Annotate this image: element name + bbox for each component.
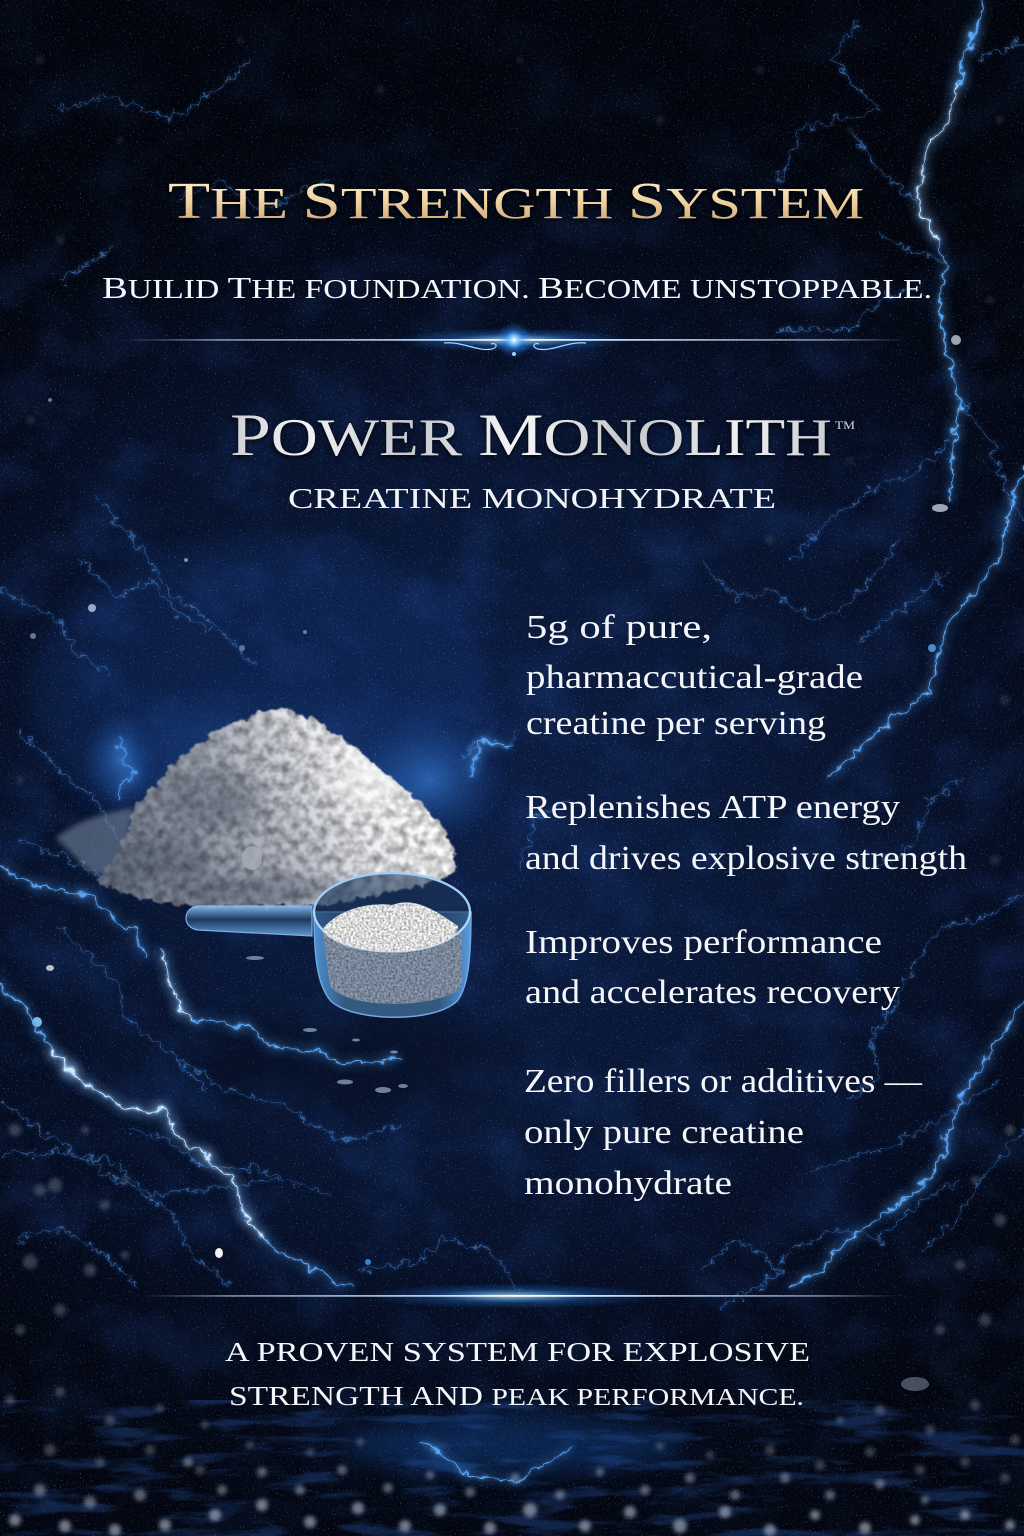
benefit 1: creatine per serving xyxy=(526,705,826,742)
benefit 1: 5g of pure, xyxy=(526,609,712,646)
top divider with ornament xyxy=(120,322,910,358)
scoop rim back xyxy=(314,873,470,951)
benefit 1: pharmaccutical-grade xyxy=(526,659,863,696)
closing statement: A PROVEN SYSTEM FOR EXPLOSIVE xyxy=(225,1337,810,1367)
benefit 4: Zero fillers or additives — xyxy=(524,1063,923,1100)
closing statement xyxy=(225,1337,810,1411)
benefit 4: monohydrate xyxy=(524,1165,732,1202)
floor row 3 bright xyxy=(9,1499,1015,1536)
benefit 3: Improves performance xyxy=(525,924,882,961)
benefit 2: and drives explosive strength xyxy=(525,840,967,877)
icon: powder pile xyxy=(56,707,455,908)
bright bolt cores xyxy=(50,85,957,1240)
scoop body xyxy=(314,912,471,1017)
side bokeh xyxy=(9,1124,1015,1335)
benefit 2: Replenishes ATP energy xyxy=(525,789,900,826)
bottom divider xyxy=(140,1283,900,1309)
scoop handle xyxy=(186,906,312,936)
scoop powder fill xyxy=(322,925,462,1004)
powder flecks on surface xyxy=(246,956,408,1093)
closing statement: STRENGTH AND PEAK PERFORMANCE. xyxy=(229,1381,804,1411)
rim front highlight xyxy=(314,912,470,952)
bokeh particles xyxy=(30,335,961,1391)
product subtitle: CREATINE MONOHYDRATE xyxy=(288,484,776,515)
powder glow xyxy=(50,670,510,870)
subtitle: BUILID THE FOUNDATION. BECOME UNSTOPPABLE. xyxy=(102,270,932,305)
icon: measuring scoop xyxy=(186,873,471,1017)
benefit 3: and accelerates recovery xyxy=(525,974,900,1011)
benefit 4 xyxy=(524,1063,923,1202)
floor row 2 mid xyxy=(34,1457,929,1508)
benefit 4: only pure creatine xyxy=(524,1114,804,1151)
powder surface xyxy=(322,902,458,952)
pile clump shading xyxy=(110,741,406,904)
benefit 2 xyxy=(525,789,967,877)
upper corners dim dust xyxy=(16,37,1010,865)
benefit 1 xyxy=(526,609,863,742)
product name: POWER MONOLITH xyxy=(230,402,832,468)
benefit 3 xyxy=(525,924,900,1011)
title: THE STRENGTH SYSTEM xyxy=(168,173,864,230)
floor row 1 dim xyxy=(5,1387,1020,1483)
trademark: TM xyxy=(835,418,855,432)
